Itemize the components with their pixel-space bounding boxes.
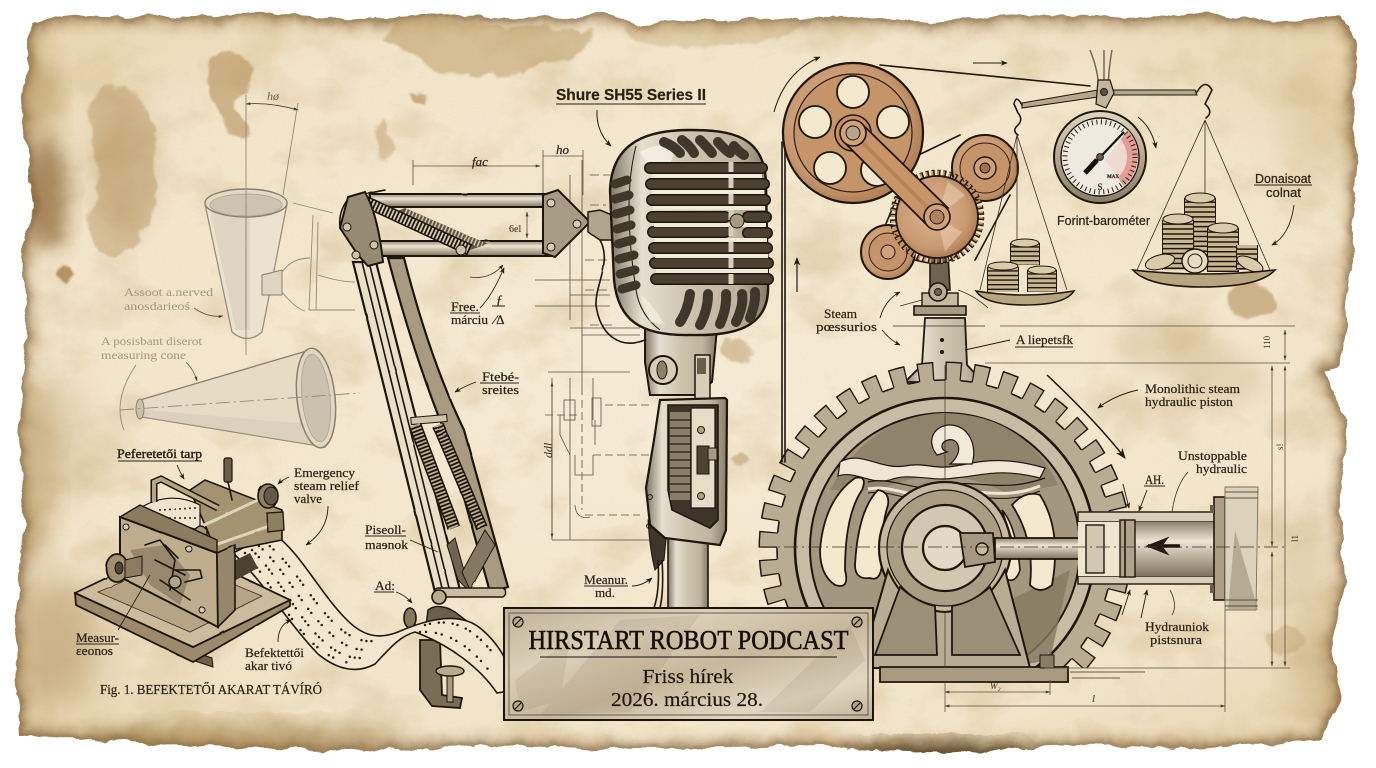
- labels: right side machinery: colnat: [1266, 185, 1301, 200]
- dimension lines right side: W₂: [990, 681, 1001, 691]
- gauge: forint barometer: [1054, 111, 1156, 203]
- labels: right side machinery: A liepetsfk: [1016, 332, 1073, 347]
- labels: right side machinery: Monolithic steam: [1145, 381, 1240, 396]
- right scale pan with coins: [1133, 120, 1275, 287]
- labels: telegraph: Befektettői: [245, 645, 304, 660]
- microphone: [610, 130, 768, 610]
- steam column above gear: [893, 255, 988, 382]
- faint horizontal measuring cone sketch: [120, 346, 360, 450]
- head mount plate: [543, 190, 645, 343]
- labels: boom arm: márciu: [451, 312, 489, 327]
- lower arm rails: [353, 258, 508, 596]
- faint vertical measuring cone sketch: hø: [267, 89, 280, 103]
- labels: telegraph: [76, 446, 360, 698]
- dimension lines right side: [945, 326, 1300, 712]
- faint vertical measuring cone sketch: [205, 89, 355, 355]
- labels: telegraph: akar tivó: [245, 658, 292, 673]
- punched paper tape: [233, 533, 516, 693]
- labels: boom arm: Ftebé-: [482, 369, 519, 384]
- telegraph machine: [75, 458, 290, 667]
- plaque screws: [513, 617, 862, 711]
- large gear assembly: [769, 255, 1258, 724]
- faint label: lower cone: A posisbant diserot: [101, 334, 203, 348]
- blueprint drafting lines behind microphone: ddl: [541, 442, 555, 458]
- wooden base: [75, 545, 290, 667]
- microphone head with grille: [610, 130, 768, 335]
- upper tension springs: [362, 200, 488, 250]
- microphone stand pole: [648, 520, 708, 610]
- boom arm: [340, 190, 645, 708]
- gear wheel clipped at the base plate: [769, 372, 1121, 724]
- small copper pulley left: [861, 225, 915, 279]
- faint label: upper cone: Assoot a.nerved: [124, 285, 213, 299]
- labels: right side machinery: [816, 171, 1312, 647]
- faint label: upper cone: anosdarieoś: [124, 299, 190, 313]
- gear rim and spokes: [776, 379, 1110, 666]
- hydraulic piston cylinder: [1078, 487, 1258, 610]
- balance scale: [976, 50, 1275, 305]
- label: microphone model: Shure SH55 Series II: [556, 87, 706, 104]
- labels: boom arm: Ad:: [375, 578, 395, 593]
- labels: telegraph: Emergency: [294, 465, 356, 480]
- title plaque: [504, 608, 873, 720]
- labels: boom arm: fac: [472, 154, 488, 169]
- gear teeth outline and fill: [769, 372, 1121, 724]
- faint label: lower cone: measuring cone: [101, 348, 186, 362]
- labels: right side machinery: hydraulic: [1196, 461, 1247, 476]
- copper gear: [893, 173, 981, 261]
- front panel with mechanism: [106, 505, 235, 627]
- scale beam: [1014, 50, 1212, 135]
- microphone yoke and swivel: [645, 328, 717, 400]
- labels: boom arm: ƒ: [496, 292, 502, 307]
- plaque brushed wash: [515, 615, 865, 715]
- wave emblem: [838, 425, 1045, 501]
- labels: right side machinery: Unstoppable: [1178, 448, 1247, 463]
- labels: boom arm: 6el: [509, 224, 521, 235]
- faint label: upper cone: [124, 285, 223, 316]
- labels: right side machinery: hydraulic piston: [1145, 394, 1234, 409]
- microphone body: [646, 398, 727, 545]
- labels: boom arm: ⁄Δ: [491, 312, 505, 327]
- labels: right side machinery: Steam: [824, 306, 857, 321]
- desk clamp: [404, 608, 464, 708]
- crank rod: [960, 533, 1087, 567]
- gauge: forint barometer: MAX: [1107, 175, 1119, 180]
- labels: right side machinery: AH.: [1145, 472, 1164, 487]
- plaque date: 2026. március 28.: [611, 689, 763, 711]
- plaque subtitle: Friss hírek: [642, 666, 734, 688]
- labels: telegraph: Fig. 1. BEFEKTETŐI AKARAT TÁVÍRÓ: [100, 681, 322, 698]
- faint label: lower cone: [101, 334, 203, 381]
- labels: right side machinery: pistsnura: [1150, 632, 1202, 647]
- frame and rollers: [140, 458, 284, 553]
- label: microphone model: [556, 87, 706, 600]
- label: microphone model: md.: [595, 585, 615, 600]
- labels: boom arm: Piseoll-: [365, 522, 406, 537]
- gauge: forint barometer: S: [1097, 182, 1103, 192]
- dimension lines right side: l1: [1290, 535, 1300, 542]
- elbow joint plate: [340, 192, 466, 266]
- copper pulley train: [783, 63, 1090, 279]
- lower knuckle and brackets: [425, 530, 505, 634]
- large copper pulley: [783, 63, 923, 203]
- labels: boom arm: sreites: [482, 382, 519, 397]
- left scale pan with coins: [976, 135, 1074, 305]
- dimension lines right side: 110: [1262, 335, 1272, 349]
- crank arm: [840, 120, 950, 230]
- plaque title: HIRSTART ROBOT PODCAST: [528, 625, 849, 655]
- labels: right side machinery: Donaisoat: [1255, 171, 1311, 186]
- labels: boom arm: ho: [556, 142, 570, 157]
- labels: telegraph: valve: [294, 491, 322, 506]
- small copper pulley right: [952, 135, 1018, 201]
- dimension lines right side: s!: [1275, 443, 1285, 450]
- labels: right side machinery: Hydrauniok: [1145, 619, 1210, 634]
- labels: boom arm: [365, 142, 570, 603]
- dimension lines right side: l: [1092, 693, 1095, 705]
- label: microphone model: Meanur.: [584, 572, 628, 587]
- labels: telegraph: steam relief: [294, 478, 360, 493]
- gear pedestal: [860, 570, 1145, 682]
- labels: right side machinery: pœssurios: [816, 319, 877, 334]
- labels: telegraph: Measur-: [76, 630, 119, 645]
- lower arm springs: [411, 414, 482, 528]
- labels: boom arm: Free.: [451, 299, 479, 314]
- upper arm bars: [340, 190, 560, 256]
- labels: telegraph: εeonos: [76, 643, 113, 658]
- labels: right side machinery: Forint-barométer: [1057, 213, 1151, 228]
- labels: telegraph: Peferetetői tarp: [117, 446, 202, 461]
- labels: boom arm: maɘnok: [365, 537, 409, 552]
- blueprint drafting lines behind microphone: [413, 150, 652, 540]
- belt line and arrows left of pulleys: [760, 57, 1285, 668]
